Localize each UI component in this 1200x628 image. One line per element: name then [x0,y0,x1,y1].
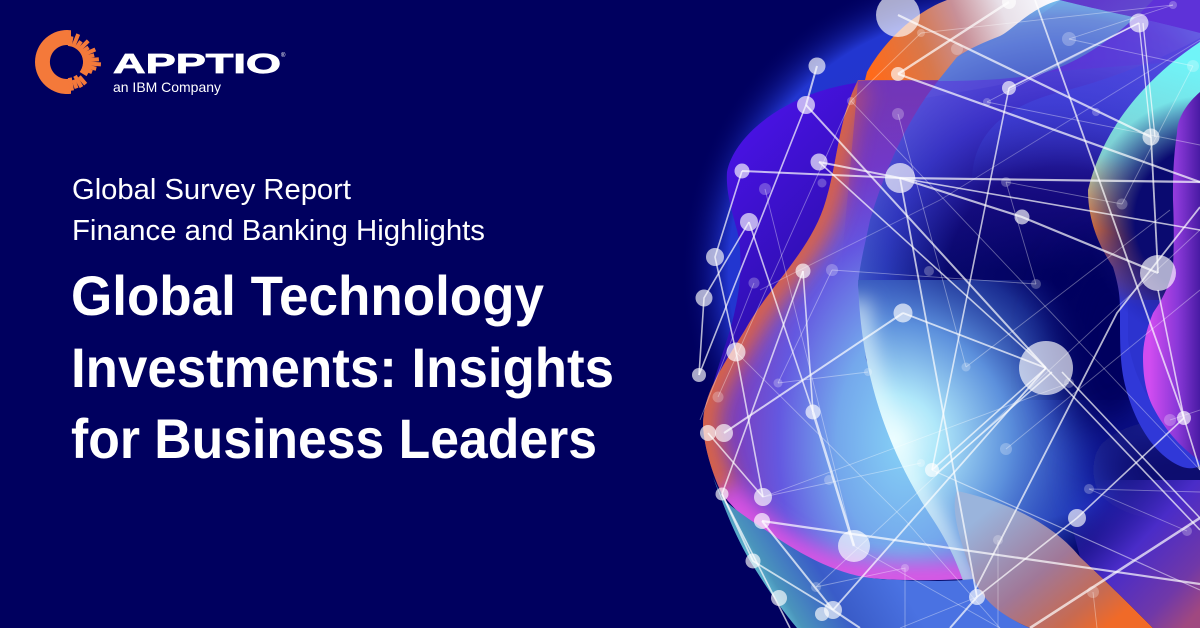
subheading [72,174,485,247]
network nodes: faint [712,1,1199,598]
panel: abstract sphere artwork [670,0,1200,628]
network nodes: bright [692,0,1191,621]
registered mark: ® [281,52,286,59]
tagline: an IBM Company [113,79,221,95]
network lines: fine [700,5,1200,628]
network lines: heavy [699,0,1200,628]
title: for Business Leaders [71,407,597,470]
icon: orange broken ring [35,30,101,94]
subheading: Finance and Banking Highlights [72,215,485,247]
title: Global Technology [71,264,544,327]
subheading: Global Survey Report [72,174,351,206]
title [71,264,614,470]
wordmark: APPTIO [113,48,281,79]
logo: Apptio an IBM Company [35,30,286,95]
title: Investments: Insights [71,336,614,399]
